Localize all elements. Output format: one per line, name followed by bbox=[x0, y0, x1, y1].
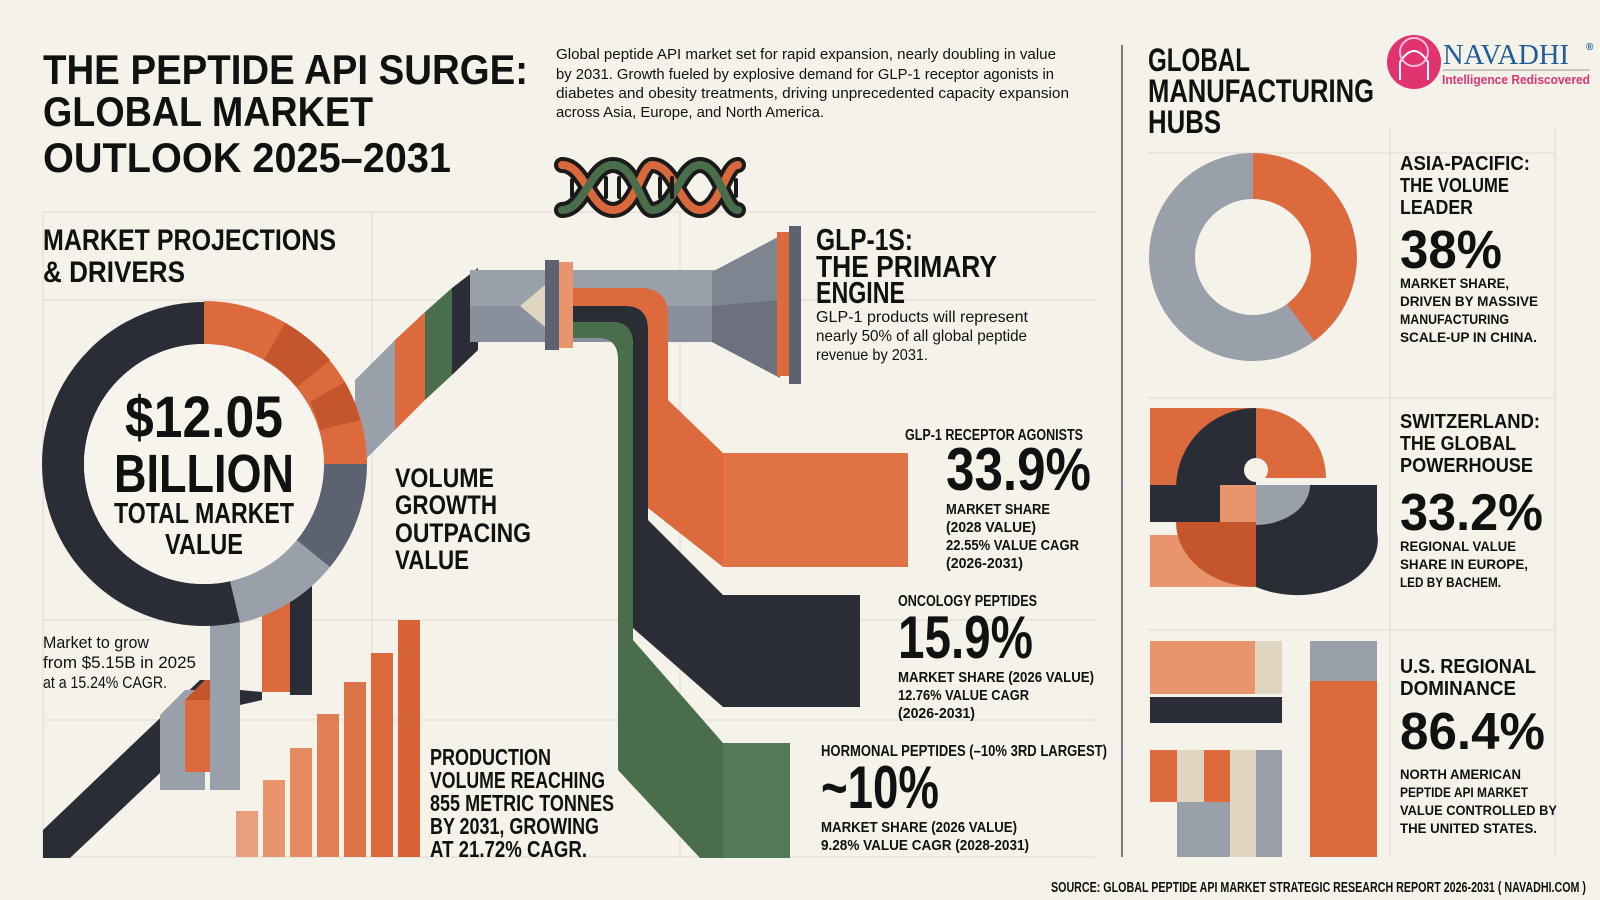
heading: GLP-1s: GLP-1 products will represent bbox=[816, 309, 1029, 326]
chart: market value donut: BILLION bbox=[114, 444, 294, 504]
text: volume growth: GROWTH bbox=[395, 490, 497, 520]
heading: GLP-1s: THE PRIMARY bbox=[816, 249, 997, 284]
stat: oncology peptides bbox=[898, 593, 1094, 722]
stat: hormonal peptides: 9.28% VALUE CAGR (2028-2031) bbox=[821, 837, 1029, 854]
intro text: by 2031. Growth fueled by explosive demand for GLP-1 receptor agonists in bbox=[556, 66, 1054, 83]
title bbox=[43, 46, 528, 181]
title: GLOBAL MARKET bbox=[43, 88, 373, 135]
text: market growth: from $5.15B in 2025 bbox=[43, 653, 196, 672]
stat: Switzerland: SWITZERLAND: bbox=[1400, 411, 1540, 433]
stat: Asia-Pacific: MARKET SHARE, bbox=[1400, 276, 1509, 291]
chart: US blocks bbox=[1150, 641, 1377, 857]
heading: GLP-1s: revenue by 2031. bbox=[816, 347, 928, 364]
stat: Asia-Pacific: 38% bbox=[1400, 220, 1502, 280]
logo: Navadhi: Intelligence Rediscovered bbox=[1442, 73, 1590, 87]
funnel pipe bbox=[470, 226, 801, 384]
chart: Asia-Pacific donut bbox=[1172, 153, 1357, 341]
stat: oncology peptides: 15.9% bbox=[898, 604, 1033, 671]
heading: market projections bbox=[43, 224, 336, 289]
stat: Switzerland bbox=[1400, 411, 1543, 590]
chart: Switzerland geometric bbox=[1150, 408, 1378, 595]
text: market growth bbox=[43, 633, 196, 692]
stat: hormonal peptides: ~10% bbox=[821, 754, 939, 821]
stat: GLP-1 receptor agonists: 22.55% VALUE CAGR bbox=[946, 537, 1079, 554]
text: volume growth: VALUE bbox=[395, 545, 469, 575]
stat: Asia-Pacific: MANUFACTURING bbox=[1400, 312, 1509, 327]
stat: US bbox=[1400, 656, 1557, 836]
stat: Switzerland: THE GLOBAL bbox=[1400, 433, 1516, 455]
stat: oncology peptides: MARKET SHARE (2026 VALUE) bbox=[898, 669, 1094, 686]
stat: US: PEPTIDE API MARKET bbox=[1400, 785, 1529, 800]
stat: hormonal peptides: HORMONAL PEPTIDES (–10% 3RD LARGEST) bbox=[821, 743, 1107, 760]
flows: segment streams bbox=[573, 288, 908, 858]
stat: US: 86.4% bbox=[1400, 703, 1545, 761]
logo: Navadhi: NAVADHI bbox=[1443, 40, 1569, 71]
heading: market projections: MARKET PROJECTIONS bbox=[43, 224, 336, 257]
stat: Switzerland: SHARE IN EUROPE, bbox=[1400, 557, 1528, 572]
title: OUTLOOK 2025–2031 bbox=[43, 134, 451, 181]
chart: market value donut: VALUE bbox=[165, 529, 243, 561]
stat: Switzerland: 33.2% bbox=[1400, 484, 1543, 542]
heading: global hubs: GLOBAL bbox=[1148, 42, 1250, 78]
text: production volume: VOLUME REACHING bbox=[430, 767, 605, 793]
text: market growth: at a 15.24% CAGR. bbox=[43, 673, 167, 692]
text: production volume: BY 2031, GROWING bbox=[430, 813, 599, 839]
text: market growth: Market to grow bbox=[43, 633, 150, 652]
stat: GLP-1 receptor agonists: MARKET SHARE bbox=[946, 501, 1050, 518]
text: volume growth bbox=[395, 463, 531, 575]
stat: Switzerland: REGIONAL VALUE bbox=[1400, 539, 1516, 554]
intro text: Global peptide API market set for rapid expansion, nearly doubling in value bbox=[556, 46, 1056, 63]
stat: hormonal peptides: MARKET SHARE (2026 VALUE) bbox=[821, 819, 1017, 836]
heading: GLP-1s bbox=[816, 222, 1029, 364]
stat: Switzerland: POWERHOUSE bbox=[1400, 455, 1533, 477]
text: production volume: AT 21.72% CAGR. bbox=[430, 836, 587, 862]
heading: global hubs: MANUFACTURING bbox=[1148, 73, 1374, 109]
text: volume growth: OUTPACING bbox=[395, 518, 531, 548]
stat: Asia-Pacific: THE VOLUME bbox=[1400, 175, 1509, 197]
text: production volume: 855 METRIC TONNES bbox=[430, 790, 614, 816]
stat: Asia-Pacific: SCALE-UP IN CHINA. bbox=[1400, 330, 1537, 345]
logo: Navadhi bbox=[1387, 35, 1594, 89]
stat: Asia-Pacific bbox=[1400, 153, 1538, 345]
stat: Asia-Pacific: DRIVEN BY MASSIVE bbox=[1400, 294, 1538, 309]
intro text bbox=[556, 46, 1069, 121]
text: production volume: PRODUCTION bbox=[430, 744, 551, 770]
chart: market value donut: TOTAL MARKET bbox=[114, 498, 294, 530]
heading: global hubs bbox=[1148, 42, 1374, 140]
stat: US: DOMINANCE bbox=[1400, 678, 1516, 700]
stat: GLP-1 receptor agonists: (2026-2031) bbox=[946, 555, 1023, 572]
stat: oncology peptides: ONCOLOGY PEPTIDES bbox=[898, 593, 1037, 610]
stat: Asia-Pacific: LEADER bbox=[1400, 197, 1473, 219]
intro text: diabetes and obesity treatments, driving unprecedented capacity expansion bbox=[556, 85, 1069, 102]
stat: hormonal peptides bbox=[821, 743, 1107, 854]
stat: US: VALUE CONTROLLED BY bbox=[1400, 803, 1557, 818]
stat: GLP-1 receptor agonists: (2028 VALUE) bbox=[946, 519, 1036, 536]
text: volume growth: VOLUME bbox=[395, 463, 494, 493]
chart: market value donut: $12.05 bbox=[125, 385, 283, 450]
text: production volume bbox=[430, 744, 614, 862]
intro text: across Asia, Europe, and North America. bbox=[556, 104, 824, 121]
stat: Asia-Pacific: ASIA-PACIFIC: bbox=[1400, 153, 1530, 175]
chart: market value donut bbox=[63, 301, 367, 623]
heading: GLP-1s: GLP-1S: bbox=[816, 222, 913, 257]
icon: DNA helix bbox=[562, 165, 738, 210]
pipes: left ribbon bbox=[43, 268, 478, 858]
stat: oncology peptides: 12.76% VALUE CAGR bbox=[898, 687, 1029, 704]
title: THE PEPTIDE API SURGE: bbox=[43, 46, 528, 93]
stat: GLP-1 receptor agonists: 33.9% bbox=[946, 436, 1091, 503]
chart: production volume bars bbox=[236, 620, 420, 857]
heading: market projections: & DRIVERS bbox=[43, 256, 185, 289]
stat: US: THE UNITED STATES. bbox=[1400, 821, 1537, 836]
stat: US: U.S. REGIONAL bbox=[1400, 656, 1536, 678]
heading: global hubs: HUBS bbox=[1148, 104, 1221, 140]
stat: GLP-1 receptor agonists bbox=[905, 427, 1091, 572]
stat: US: NORTH AMERICAN bbox=[1400, 767, 1521, 782]
heading: GLP-1s: nearly 50% of all global peptide bbox=[816, 328, 1027, 345]
stat: Switzerland: LED BY BACHEM. bbox=[1400, 575, 1501, 590]
logo: Navadhi: ® bbox=[1586, 42, 1594, 53]
stat: oncology peptides: (2026-2031) bbox=[898, 705, 975, 722]
stat: GLP-1 receptor agonists: GLP-1 RECEPTOR AGONISTS bbox=[905, 427, 1083, 444]
heading: GLP-1s: ENGINE bbox=[816, 275, 905, 310]
